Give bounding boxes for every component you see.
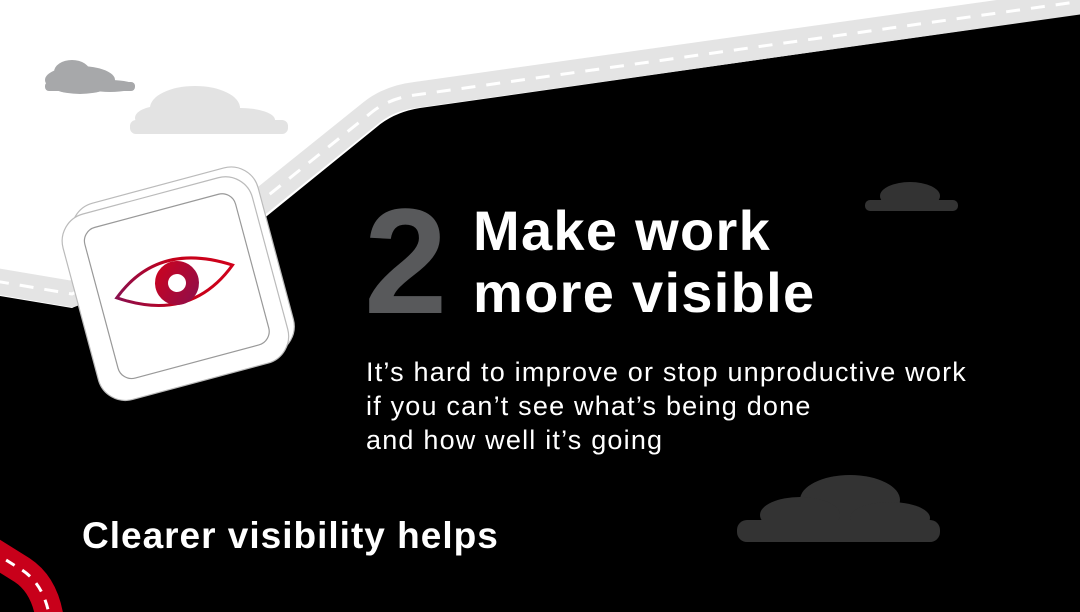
- eye: [111, 248, 238, 317]
- big number 2: 2: [364, 177, 447, 345]
- road: [0, 0, 1080, 294]
- cloud light: [130, 86, 288, 134]
- cloud dark large: [737, 475, 940, 542]
- title: [473, 199, 815, 324]
- body text: and how well it’s going: [366, 425, 663, 455]
- title: Make work: [473, 199, 771, 262]
- subheading: Clearer visibility helps: [82, 515, 499, 556]
- cloud dark small: [865, 182, 958, 211]
- cloud gray: [45, 60, 135, 94]
- body text: if you can’t see what’s being done: [366, 391, 812, 421]
- body text: It’s hard to improve or stop unproductive work: [366, 357, 967, 387]
- title: more visible: [473, 261, 815, 324]
- body text: [366, 357, 967, 455]
- icon card: eye: [62, 166, 295, 402]
- red road: [0, 550, 50, 612]
